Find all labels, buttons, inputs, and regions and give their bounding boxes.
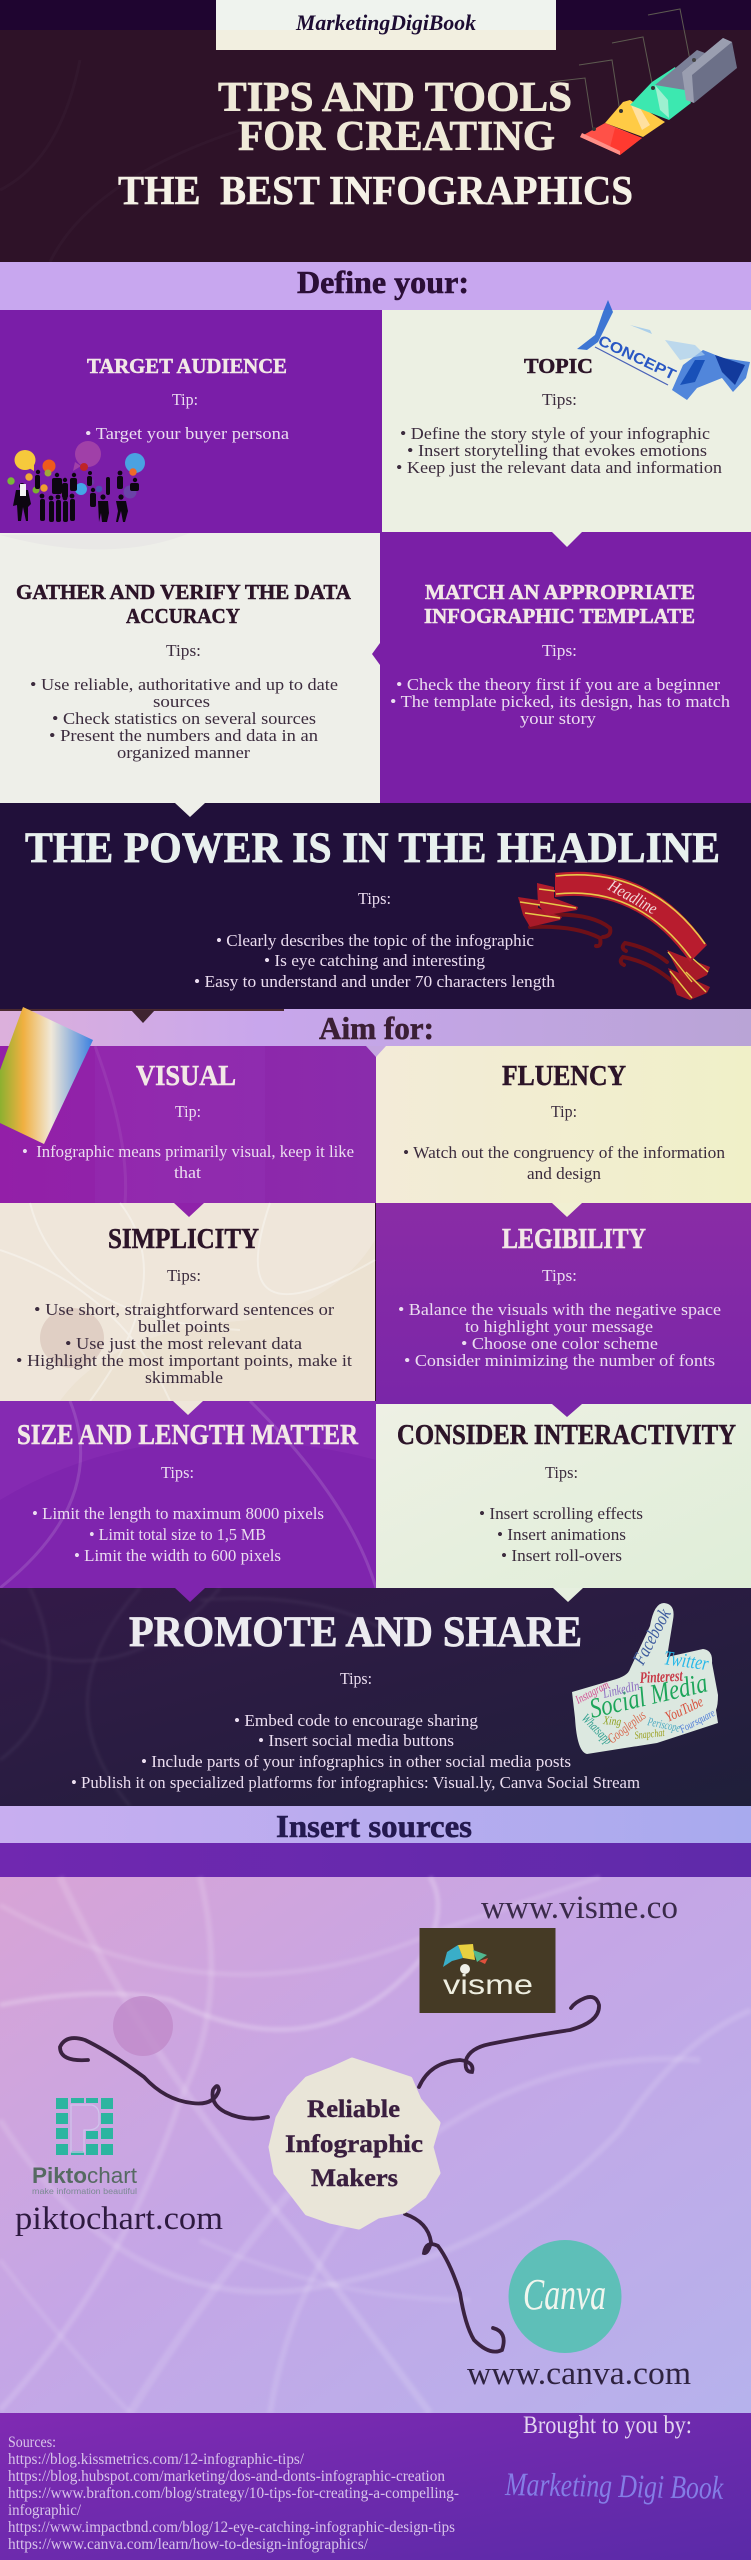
title: THE BEST INFOGRAPHICS bbox=[118, 167, 633, 213]
panel: gather and verify: • Present the numbers and data in an bbox=[49, 726, 319, 745]
arrow: flourish to visme bbox=[419, 1997, 599, 2087]
panel: gather and verify: ACCURACY bbox=[126, 604, 240, 628]
panel: footer bbox=[0, 2412, 751, 2560]
panel: consider interactivity bbox=[376, 1404, 751, 1588]
badge: reliable infographic makers: Infographic bbox=[285, 2131, 423, 2158]
panel: consider interactivity: • Insert animations bbox=[497, 1525, 626, 1544]
panel: target audience bbox=[0, 310, 392, 533]
icon: headline ribbon bbox=[518, 872, 710, 1000]
text block: sources: https://blog.kissmetrics.com/12-infographic-tips/ bbox=[8, 2451, 305, 2468]
arrow: flourish to piktochart bbox=[60, 2038, 268, 2119]
panel: the power is in the headline: • Clearly describes the topic of the infographic bbox=[216, 931, 534, 950]
panel: simplicity: SIMPLICITY bbox=[108, 1224, 259, 1255]
text block: sources: infographic/ bbox=[8, 2502, 82, 2519]
panel: size and length: • Limit the length to maximum 8000 pixels bbox=[32, 1504, 324, 1523]
panel: legibility: • Consider minimizing the number of fonts bbox=[404, 1351, 715, 1370]
panel: gather and verify: organized manner bbox=[117, 743, 250, 762]
panel: visual: that bbox=[174, 1163, 201, 1182]
panel: promote and share: • Insert social media buttons bbox=[258, 1731, 454, 1750]
panel: visual: VISUAL bbox=[136, 1061, 236, 1092]
badge: reliable infographic makers bbox=[271, 2060, 438, 2227]
icon: social media thumbs-up: Googleplus bbox=[605, 1708, 649, 1747]
icon: canva logo bbox=[508, 2240, 622, 2353]
panel: match a template: • The template picked, its design, has to match bbox=[390, 692, 731, 711]
panel: gather and verify: GATHER AND VERIFY THE DATA bbox=[16, 580, 351, 604]
icon: concept stamp bbox=[577, 300, 750, 400]
panel: legibility: • Balance the visuals with the negative space bbox=[398, 1300, 721, 1319]
arrow: flourish to canva bbox=[405, 2214, 504, 2352]
text block: sources bbox=[8, 2434, 459, 2553]
panel: legibility bbox=[376, 1203, 751, 1404]
panel: promote and share: PROMOTE AND SHARE bbox=[129, 1609, 582, 1656]
panel: match a template: Tips: bbox=[542, 641, 577, 660]
panel: legibility: to highlight your message bbox=[465, 1317, 653, 1336]
icon: social media thumbs-up: Twitter bbox=[662, 1647, 710, 1675]
panel: gather and verify: • Check statistics on several sources bbox=[52, 709, 316, 728]
icon: crowd with speech bubbles bbox=[7, 441, 145, 522]
section band: insert sources bbox=[0, 1806, 751, 1877]
panel: size and length: Tips: bbox=[161, 1463, 194, 1482]
panel: the power is in the headline: • Is eye catching and interesting bbox=[264, 951, 485, 970]
panel: simplicity: skimmable bbox=[145, 1368, 223, 1387]
panel: simplicity: • Highlight the most important points, make it bbox=[16, 1351, 352, 1370]
panel: the power is in the headline: THE POWER IS IN THE HEADLINE bbox=[25, 825, 720, 872]
brand tab: MarketingDigiBook bbox=[295, 10, 476, 35]
panel: topic bbox=[382, 300, 751, 532]
panel: match a template: • Check the theory first if you are a beginner bbox=[396, 675, 720, 694]
panel: consider interactivity: • Insert roll-overs bbox=[501, 1546, 622, 1565]
icon: staircase arrow bbox=[550, 9, 737, 155]
section band: define your bbox=[0, 262, 751, 310]
text block: sources: Sources: bbox=[8, 2434, 56, 2451]
panel: match a template: MATCH AN APPROPRIATE bbox=[425, 580, 695, 604]
panel: fluency: • Watch out the congruency of the information bbox=[403, 1143, 726, 1162]
panel: simplicity: Tips: bbox=[167, 1266, 201, 1285]
panel: promote and share bbox=[0, 1588, 751, 1806]
link: piktochart url: piktochart.com bbox=[15, 2201, 223, 2237]
panel: topic: • Keep just the relevant data and information bbox=[396, 458, 723, 477]
panel: size and length: • Limit the width to 600 pixels bbox=[74, 1546, 281, 1565]
panel: simplicity: bullet points bbox=[138, 1317, 230, 1336]
panel: legibility: • Choose one color scheme bbox=[461, 1334, 658, 1353]
text block: sources: https://www.brafton.com/blog/strategy/10-tips-for-creating-a-compelling- bbox=[8, 2485, 459, 2502]
panel: target audience: • Target your buyer persona bbox=[85, 424, 289, 443]
title: FOR CREATING bbox=[238, 114, 555, 160]
panel: match a template: INFOGRAPHIC TEMPLATE bbox=[424, 604, 695, 628]
icon: canva logo: Canva bbox=[523, 2270, 606, 2319]
icon: headline ribbon: Headline bbox=[604, 875, 661, 918]
panel: fluency bbox=[366, 1046, 751, 1203]
panel: target audience: TARGET AUDIENCE bbox=[87, 354, 287, 378]
icon: visme logo: visme bbox=[443, 1969, 533, 2000]
icon: social media thumbs-up: Instagram bbox=[572, 1677, 611, 1707]
panel: gather and verify: • Use reliable, authoritative and up to date bbox=[30, 675, 338, 694]
icon: social media thumbs-up: Facebook bbox=[628, 1605, 676, 1669]
panel: visual: Tip: bbox=[175, 1102, 201, 1121]
icon: piktochart logo: make information beautiful bbox=[32, 2187, 137, 2196]
badge: reliable infographic makers: Reliable bbox=[307, 2096, 400, 2123]
title bbox=[118, 75, 633, 213]
panel: legibility: LEGIBILITY bbox=[502, 1224, 646, 1255]
brand tab bbox=[216, 0, 556, 50]
icon: social media thumbs-up: Snapchat bbox=[634, 1727, 666, 1742]
panel: the power is in the headline bbox=[0, 803, 751, 1009]
panel: visual: • Infographic means primarily visual, keep it like bbox=[22, 1142, 354, 1161]
panel: topic: • Define the story style of your infographic bbox=[400, 424, 710, 443]
title: TIPS AND TOOLS bbox=[218, 75, 572, 121]
panel: reliable infographic makers bbox=[0, 1877, 751, 2413]
icon: social media thumbs-up: Pinterest bbox=[639, 1668, 684, 1687]
panel: topic: • Insert storytelling that evokes emotions bbox=[407, 441, 707, 460]
icon: social media thumbs-up: LinkedIn bbox=[601, 1679, 641, 1702]
icon: social media thumbs-up: YouTube bbox=[663, 1694, 706, 1726]
credit: brought to you by: Brought to you by: bbox=[523, 2412, 692, 2439]
panel: consider interactivity: • Insert scrolling effects bbox=[479, 1504, 643, 1523]
icon: social media thumbs-up: Foursquare bbox=[677, 1707, 717, 1736]
icon: concept stamp: CONCEPT bbox=[595, 332, 678, 384]
panel: promote and share: • Publish it on specialized platforms for infographics: Visual.ly, Canva Social Stream bbox=[71, 1773, 640, 1792]
icon: social media thumbs-up bbox=[572, 1603, 718, 1754]
section band: define your: Define your: bbox=[297, 264, 469, 300]
icon: visme logo bbox=[420, 1928, 556, 2013]
panel: target audience: Tip: bbox=[172, 390, 198, 409]
link: visme url: www.visme.co bbox=[481, 1890, 678, 1926]
panel: topic: Tips: bbox=[542, 390, 577, 409]
panel: promote and share: • Include parts of your infographics in other social media posts bbox=[141, 1752, 571, 1771]
icon: social media thumbs-up: Xing bbox=[602, 1713, 622, 1729]
panel: gather and verify bbox=[0, 533, 380, 803]
section band: aim for: Aim for: bbox=[319, 1010, 434, 1046]
icon: social media thumbs-up: Whatsapp bbox=[579, 1711, 616, 1748]
panel: the power is in the headline: Tips: bbox=[358, 889, 391, 908]
section band: aim for bbox=[0, 1009, 751, 1046]
panel: simplicity: • Use short, straightforward sentences or bbox=[34, 1300, 334, 1319]
panel: visual bbox=[0, 1046, 376, 1203]
panel: promote and share: Tips: bbox=[340, 1669, 372, 1688]
panel: size and length: • Limit total size to 1,5 MB bbox=[89, 1525, 266, 1544]
section band: insert sources: Insert sources bbox=[276, 1808, 472, 1844]
panel: header bbox=[0, 0, 751, 262]
icon: social media thumbs-up: Periscope bbox=[646, 1714, 682, 1735]
panel: match a template: your story bbox=[520, 709, 597, 728]
panel: fluency: and design bbox=[527, 1164, 601, 1183]
panel: fluency: Tip: bbox=[551, 1102, 577, 1121]
panel: topic: TOPIC bbox=[524, 354, 593, 378]
panel: simplicity: • Use just the most relevant data bbox=[65, 1334, 302, 1353]
panel: promote and share: • Embed code to encourage sharing bbox=[234, 1711, 479, 1730]
link: canva url: www.canva.com bbox=[467, 2356, 691, 2392]
panel: consider interactivity: Tips: bbox=[545, 1463, 578, 1482]
panel: gather and verify: sources bbox=[153, 692, 210, 711]
panel: match a template bbox=[372, 532, 751, 803]
icon: social media thumbs-up: Social Media bbox=[587, 1668, 710, 1725]
text block: sources: https://blog.hubspot.com/marketing/dos-and-donts-infographic-creation bbox=[8, 2468, 445, 2485]
icon: piktochart logo: Piktochart bbox=[32, 2163, 137, 2188]
panel: size and length: SIZE AND LENGTH MATTER bbox=[17, 1420, 359, 1451]
panel: size and length bbox=[0, 1401, 376, 1588]
panel: the power is in the headline: • Easy to understand and under 70 characters length bbox=[194, 972, 556, 991]
badge: reliable infographic makers: Makers bbox=[311, 2165, 398, 2192]
text block: sources: https://www.impactbnd.com/blog/12-eye-catching-infographic-design-tips bbox=[8, 2519, 455, 2536]
icon: rainbow tilted card bbox=[0, 1007, 93, 1144]
panel: fluency: FLUENCY bbox=[502, 1061, 626, 1092]
panel: simplicity bbox=[0, 1203, 375, 1401]
icon: piktochart logo bbox=[32, 2098, 137, 2196]
panel: legibility: Tips: bbox=[542, 1266, 577, 1285]
panel: gather and verify: Tips: bbox=[166, 641, 201, 660]
text block: sources: https://www.canva.com/learn/how-to-design-infographics/ bbox=[8, 2536, 369, 2553]
